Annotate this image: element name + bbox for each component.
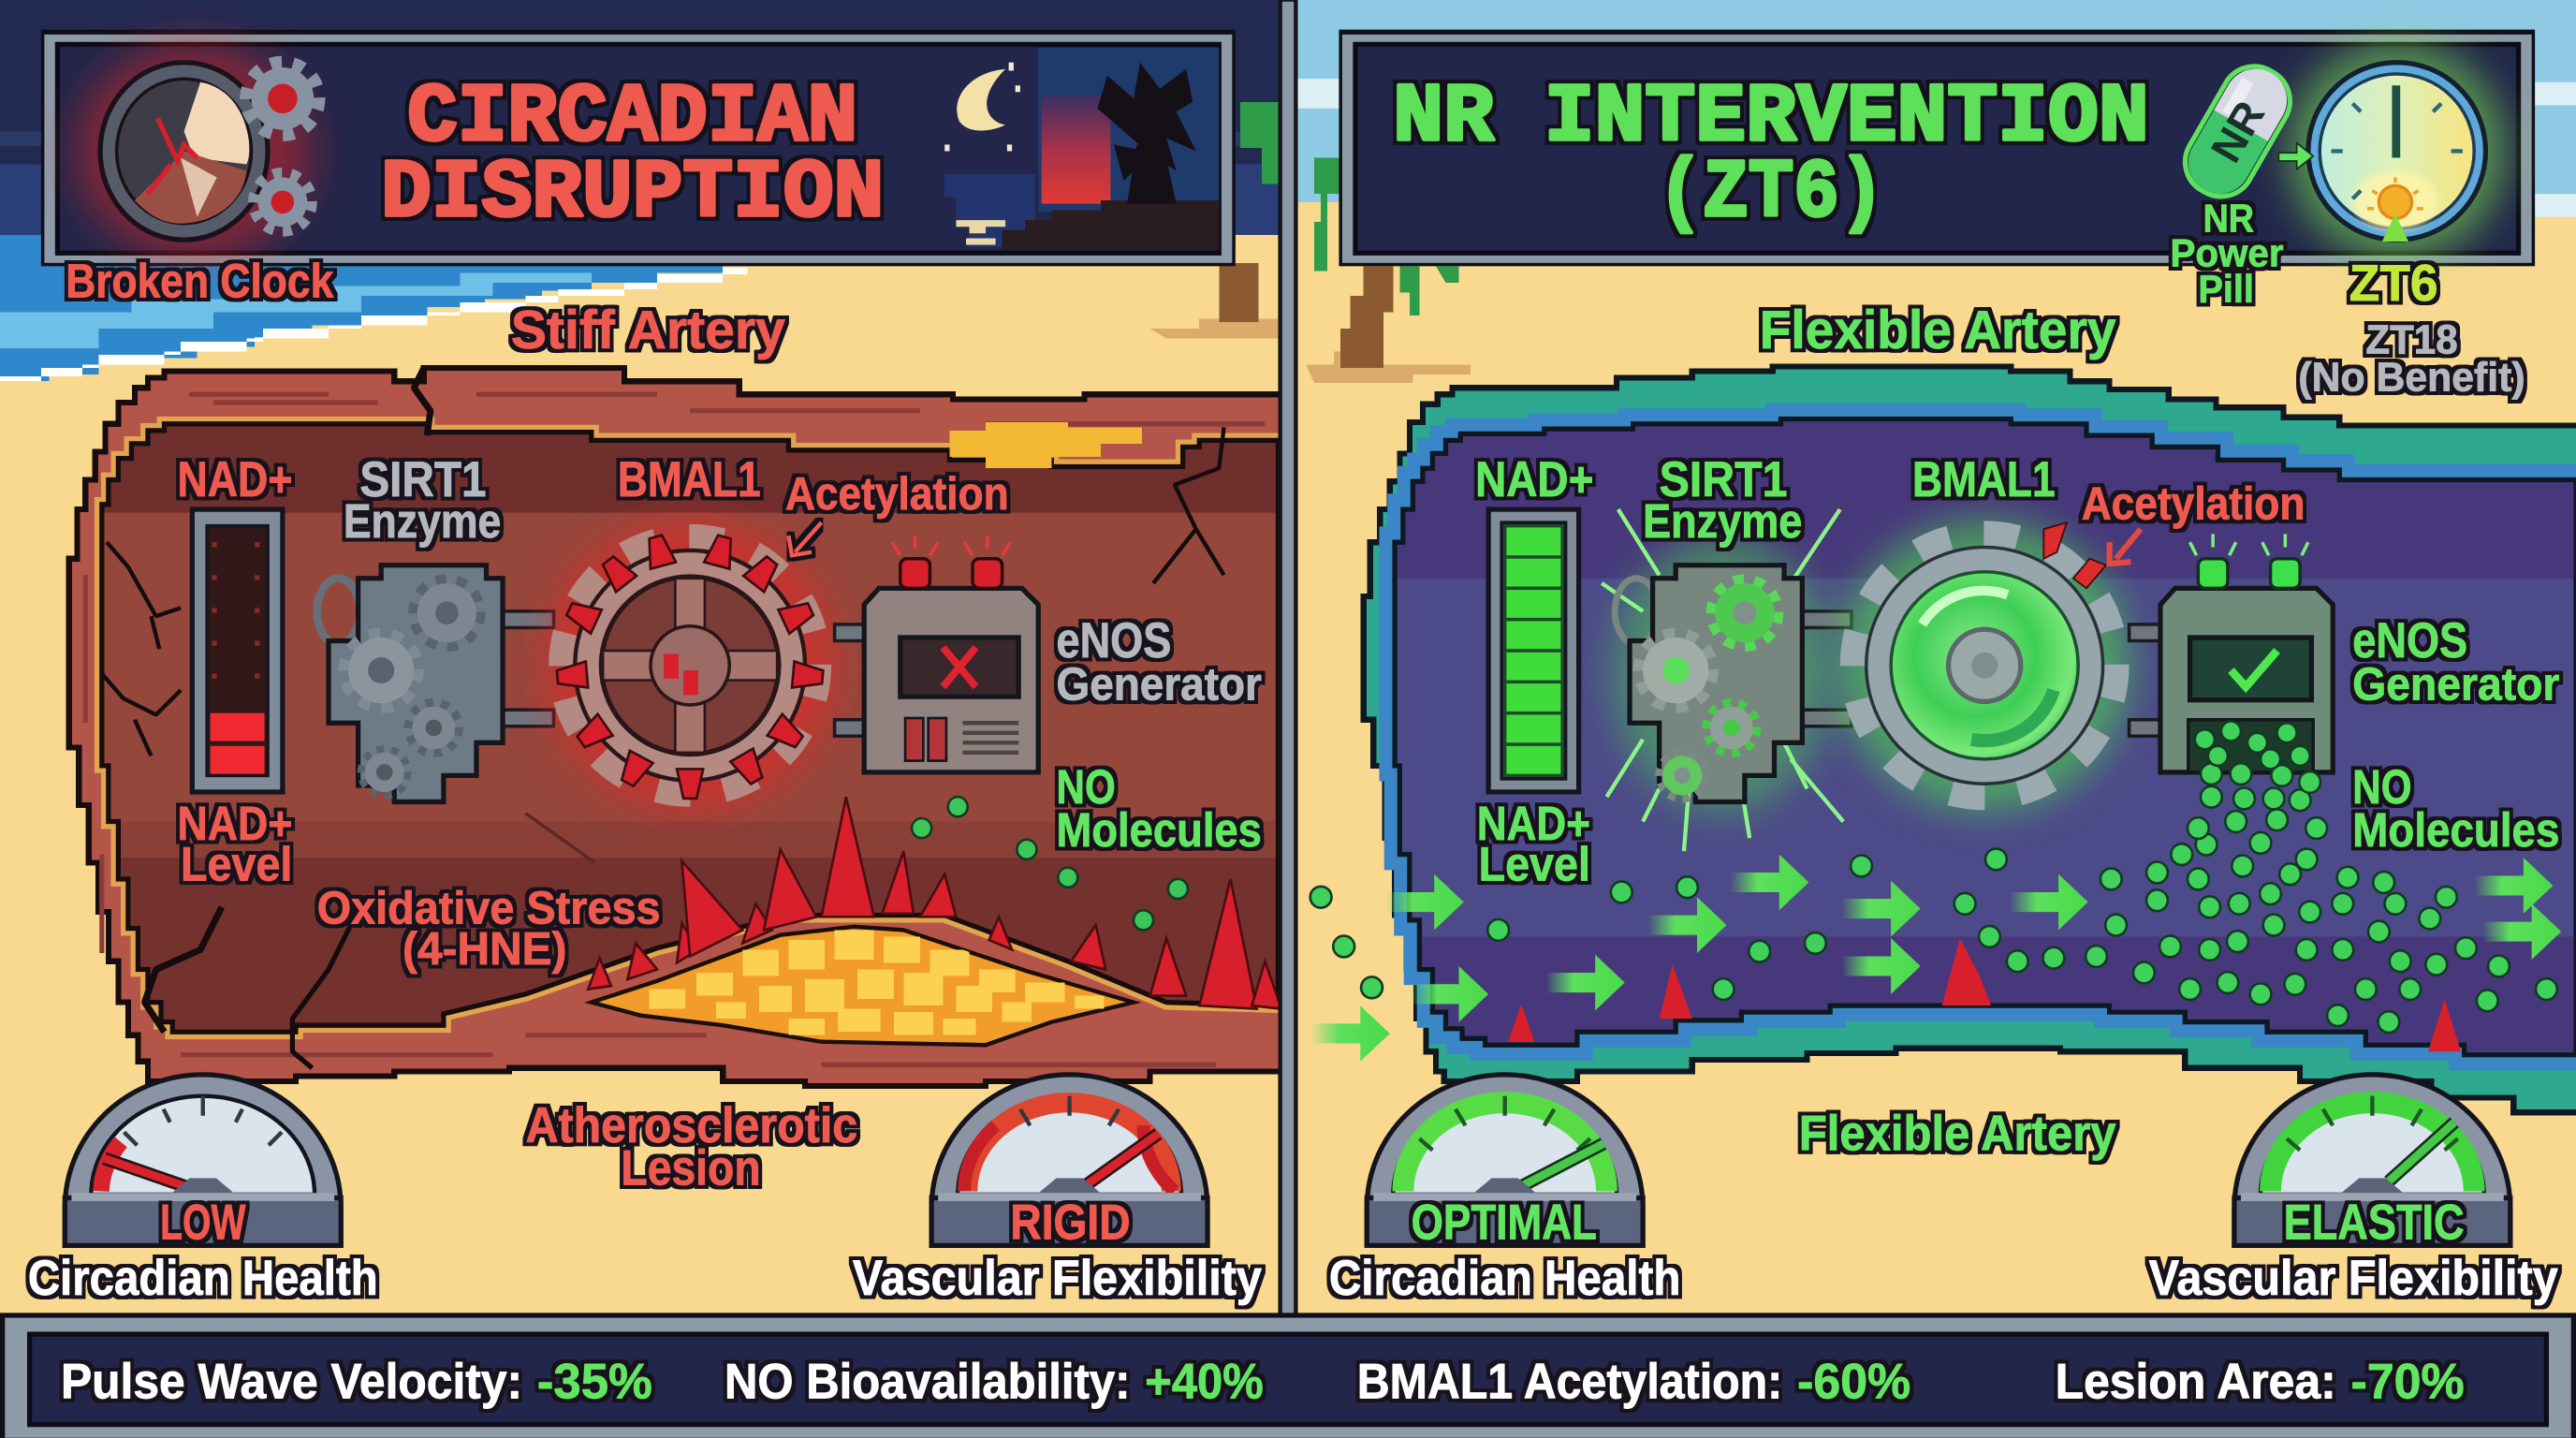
foam	[0, 268, 748, 389]
palm tree right	[1306, 157, 1471, 383]
label: ZT18 no benefit: (No Benefit)	[2298, 355, 2525, 401]
labels: right artery: Enzyme	[1643, 494, 1802, 548]
NAD+ meter full	[1488, 509, 1579, 792]
labels: left artery: NAD+	[178, 452, 292, 507]
label: NR Power Pill: Power	[2170, 230, 2284, 274]
heading: NR INTERVENTION	[1393, 72, 2149, 165]
labels: left artery: Level	[181, 838, 292, 891]
stat: BMAL1 acetylation: BMAL1 Acetylation:	[1357, 1355, 1782, 1410]
labels: right artery	[1475, 452, 2559, 891]
icon: NR power pill	[2174, 54, 2313, 209]
label: NR Power Pill	[2170, 196, 2284, 311]
label: NR Power Pill: NR	[2203, 196, 2254, 240]
labels: left artery: NO	[1057, 760, 1116, 814]
labels: right artery: NAD+	[1477, 797, 1590, 850]
heading line 2: (ZT6)	[1658, 148, 1884, 241]
labels: right artery: Molecules	[2352, 803, 2559, 857]
labels: right artery: BMAL1	[1912, 452, 2056, 507]
label: ZT6: ZT6	[2349, 255, 2438, 312]
gauge: vascular flexibility rigid: RIGID	[1010, 1195, 1131, 1250]
NAD+ meter low	[192, 509, 283, 792]
stat: pulse wave velocity: -35%	[537, 1355, 652, 1410]
labels: right artery: Level	[1479, 838, 1590, 891]
stat: pulse wave velocity: Pulse Wave Velocity:	[61, 1355, 522, 1410]
labels: right artery: NAD+	[1475, 452, 1593, 507]
labels: left artery: Enzyme	[344, 494, 501, 548]
acetyl red tags few	[2043, 522, 2106, 588]
SIRT1 machine energised	[1602, 509, 1852, 851]
artery: stiff	[66, 368, 1281, 1086]
BMAL1 gear active	[1840, 521, 2130, 810]
stat: NO bioavailability: +40%	[1145, 1355, 1264, 1410]
stats bar	[0, 1313, 2576, 1438]
heading line 2: DISRUPTION	[381, 148, 884, 241]
title panel: NR intervention	[1339, 30, 2535, 266]
label: ZT18 no benefit: ZT18	[2365, 316, 2458, 362]
gauge: circadian health low	[65, 1075, 341, 1250]
flow arrows	[1311, 855, 2561, 1062]
BMAL1 gear rusted	[546, 521, 835, 810]
wall plaque deposit	[949, 422, 1142, 468]
NO molecules sparse	[912, 797, 1188, 930]
palm tree left	[1150, 102, 1278, 339]
label: Stiff Artery: Stiff Artery	[511, 301, 785, 360]
atherosclerotic plaque	[592, 927, 1134, 1045]
arrow: acetylation pointer	[788, 522, 822, 555]
gauge: vascular flexibility elastic: ELASTIC	[2284, 1195, 2465, 1250]
panel: right beach day scene	[1298, 0, 2576, 1314]
gauge: vascular flexibility elastic	[2234, 1075, 2510, 1250]
icon: broken clock with gears	[76, 43, 317, 259]
gauge: circadian health low: LOW	[160, 1195, 246, 1250]
stat: BMAL1 acetylation: -60%	[1797, 1355, 1910, 1410]
labels: left artery: Atherosclerotic	[526, 1098, 857, 1153]
labels: right artery: Generator	[2352, 660, 2559, 711]
labels: right artery: NO	[2352, 760, 2411, 814]
title panel: circadian disruption	[41, 30, 1236, 266]
labels: left artery: Acetylation	[785, 469, 1009, 520]
oxidative stress spikes	[588, 797, 1281, 1009]
eNOS generator working	[2130, 534, 2333, 772]
labels: left artery: eNOS	[1057, 613, 1171, 668]
labels: right artery: SIRT1	[1660, 452, 1788, 507]
labels: left artery: Lesion	[621, 1140, 761, 1196]
labels: left artery: BMAL1	[618, 452, 761, 507]
small residual spikes	[1508, 938, 2461, 1051]
panel: left beach night scene	[0, 0, 1278, 1314]
labels: left artery: (4-HNE)	[402, 924, 567, 975]
labels: left artery: SIRT1	[359, 452, 487, 507]
label: ZT18 no benefit	[2298, 316, 2525, 401]
label: NR Power Pill: Pill	[2198, 267, 2254, 311]
gauge: circadian health optimal	[1367, 1075, 1643, 1250]
icon: ZT6 clock	[2289, 43, 2506, 259]
NO molecules stream	[1310, 721, 2557, 1033]
gauge: circadian health optimal: OPTIMAL	[1412, 1195, 1597, 1250]
label: Circadian Health right: Circadian Health	[1329, 1251, 1680, 1306]
stat: lesion area: Lesion Area:	[2056, 1355, 2336, 1410]
stat: NO bioavailability: NO Bioavailability:	[724, 1355, 1131, 1410]
labels: left artery: Molecules	[1057, 803, 1262, 857]
gauge: vascular flexibility rigid	[931, 1075, 1208, 1250]
acetyl red tags	[556, 534, 824, 799]
labels: left artery: NAD+	[178, 797, 292, 850]
icon: sunset palm island	[1003, 48, 1219, 250]
artery lumen flexible	[1397, 421, 2574, 1052]
artery lumen	[104, 427, 1276, 1030]
heading: CIRCADIAN	[407, 72, 857, 165]
labels: left artery: Oxidative Stress	[317, 883, 661, 933]
artery: flexible	[1364, 366, 2576, 1112]
icon: moon and stars	[944, 63, 1035, 246]
stat: lesion area: -70%	[2351, 1355, 2465, 1410]
eNOS generator broken	[835, 536, 1038, 772]
label: Vascular Flexibility: Vascular Flexibility	[853, 1251, 1262, 1306]
SIRT1 machine grey	[317, 565, 553, 801]
labels: right artery: Acetylation	[2082, 479, 2305, 530]
icon: NR power pill: NR	[2202, 93, 2274, 170]
sea	[0, 235, 1236, 381]
panel divider	[1281, 0, 1295, 1318]
label: Broken Clock: Broken Clock	[66, 255, 334, 308]
labels: left artery: Generator	[1057, 660, 1262, 711]
cracks	[102, 368, 1224, 1068]
label: Circadian Health: Circadian Health	[28, 1251, 378, 1306]
label: Flexible Artery bottom: Flexible Artery	[1799, 1107, 2116, 1162]
labels: right artery: eNOS	[2352, 613, 2467, 668]
arrow: acetylation pointer right	[2110, 529, 2141, 564]
label: Flexible Artery top: Flexible Artery	[1760, 301, 2116, 360]
labels: left artery	[178, 452, 1262, 1196]
